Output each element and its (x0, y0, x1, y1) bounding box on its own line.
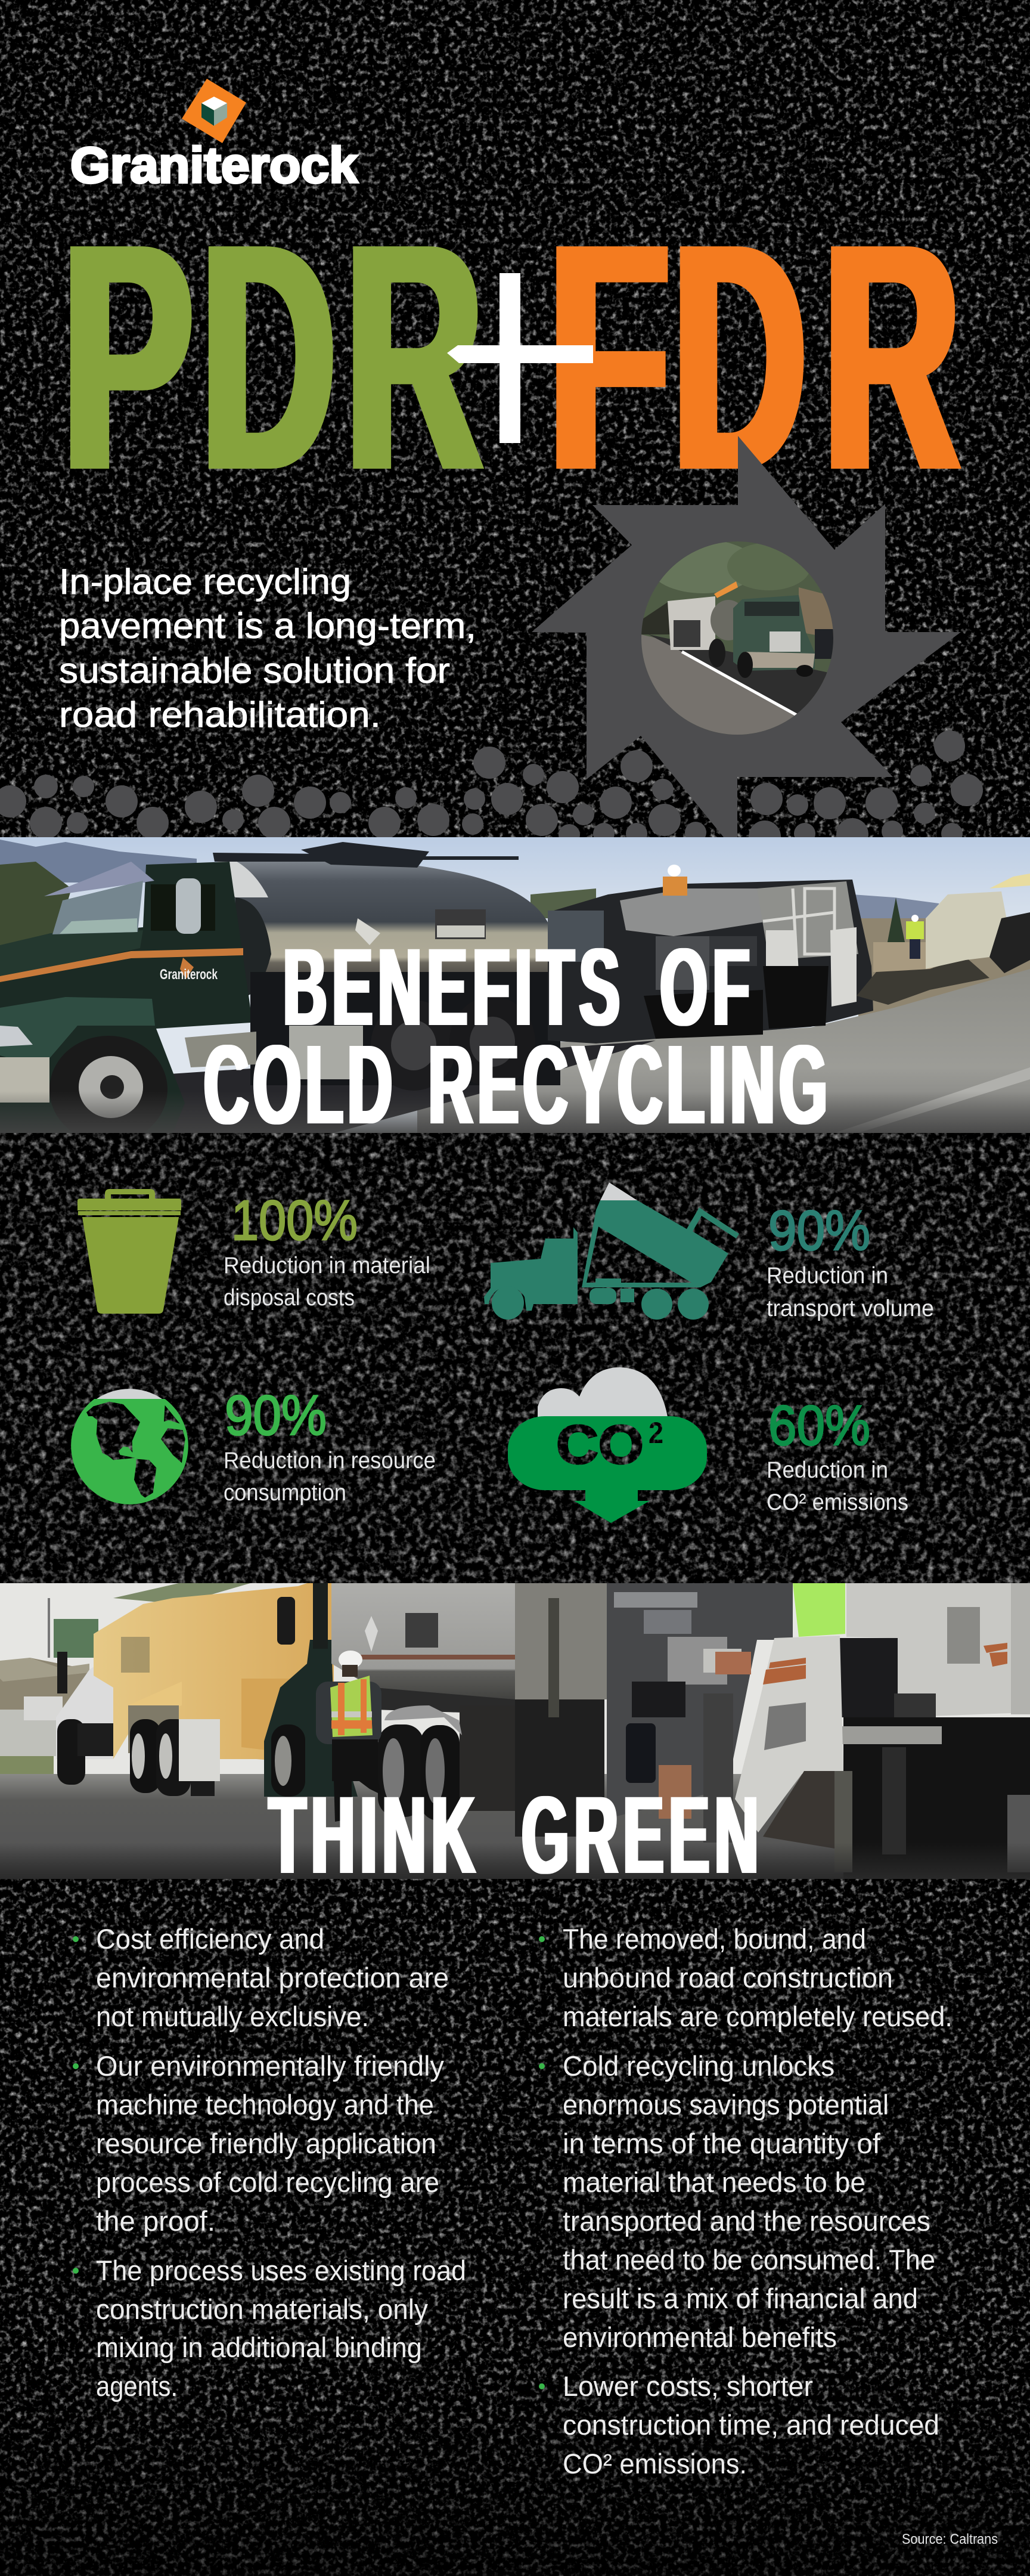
stat: 90% reduction in transport volume: 90% (768, 1199, 870, 1262)
background: asphalt texture middle (0, 1133, 1030, 1583)
icon: CO2 cloud with down arrow (508, 1367, 707, 1523)
bullet: materials reused: unbound road construction (563, 1962, 893, 1993)
bullet: cost efficiency (73, 1923, 449, 2032)
icon: orange diamond with cube (182, 79, 246, 143)
rear tyres and mudflap (130, 1719, 161, 1793)
bullet: savings potential: enormous savings potential (563, 2089, 889, 2120)
stat: 60% reduction in CO2 emissions (508, 1367, 908, 1523)
heading: Benefits of Cold Recycling: BENEFITS OF (283, 925, 755, 1049)
road surface (417, 969, 1030, 1133)
bullet: cost efficiency: environmental protection are (96, 1962, 449, 1993)
bullet: lower costs: construction time, and reduced (563, 2409, 939, 2441)
title word: FDR: D (673, 176, 806, 537)
bullet: machine technology: process of cold recycling are (96, 2166, 439, 2198)
stat: 90% reduction in resource consumption: consumption (224, 1480, 346, 1506)
stat: 90% reduction in transport volume: Reduction in (767, 1263, 888, 1289)
stat: 90% reduction in resource consumption (71, 1384, 436, 1506)
icon: saw blade gear with photo (532, 436, 961, 841)
yellow tanker (94, 1583, 334, 1765)
bullet: savings potential: material that needs to be (563, 2166, 865, 2198)
bullet: savings potential: environmental benefits (563, 2321, 837, 2353)
milling machine (548, 880, 873, 1044)
source note: Source: Caltrans (902, 2531, 998, 2547)
front wheel (49, 1036, 167, 1143)
heading: Think Green: THINK GREEN (269, 1773, 764, 1897)
icon: globe (71, 1389, 188, 1504)
bullet: lower costs (539, 2370, 939, 2479)
bullet: machine technology: the proof. (96, 2205, 215, 2237)
bullets: left column (73, 1923, 466, 2402)
tyres (378, 1724, 424, 1817)
bullet: existing materials: mixing in additional binding (96, 2332, 422, 2363)
road (0, 1774, 1030, 1879)
stat: 100% reduction in material disposal costs: Reduction in material (224, 1253, 430, 1278)
machinery (515, 1583, 607, 1699)
intro text block: road rehabilitation. (59, 695, 381, 735)
bullet: savings potential: that need to be consumed. The (563, 2244, 935, 2275)
cab (0, 862, 250, 1133)
tanker (218, 854, 551, 990)
title word: FDR: F (548, 177, 670, 538)
bullet: lower costs: CO² emissions. (563, 2448, 747, 2479)
bullet: existing materials (73, 2255, 466, 2402)
background: asphalt texture bottom (0, 1879, 1030, 2576)
title word: PDR: D (201, 176, 336, 537)
house (0, 1658, 89, 1711)
bullet: machine technology (73, 2050, 444, 2237)
title word: PDR (63, 176, 483, 538)
worker (316, 1682, 381, 1744)
stat: 90% reduction in transport volume: transport volume (767, 1296, 934, 1321)
intro text block: In-place recycling (59, 562, 351, 602)
intro text block: pavement is a long-term, (59, 606, 476, 646)
title word: FDR (548, 176, 960, 538)
stat: 90% reduction in transport volume (484, 1182, 934, 1321)
icon: trash can (77, 1189, 181, 1314)
bullet: materials reused: The removed, bound, and (563, 1923, 866, 1955)
heading: Benefits of Cold Recycling (204, 925, 832, 1148)
roof rack (213, 842, 519, 868)
title word: PDR: P (63, 177, 193, 537)
bullet: materials reused: materials are completely reused. (563, 2001, 953, 2032)
intro text block: sustainable solution for (59, 651, 450, 691)
decorative: grey aggregate circles (0, 730, 983, 853)
bullet: savings potential: transported and the resources (563, 2205, 930, 2237)
distant ground and trees (858, 918, 1030, 1026)
bullet: existing materials: agents. (96, 2370, 178, 2402)
bullet: savings potential (539, 2050, 935, 2353)
icon: dump truck (484, 1182, 739, 1320)
stat: 100% reduction in material disposal costs: disposal costs (224, 1285, 355, 1311)
bullet: materials reused (539, 1923, 953, 2032)
stat: 60% reduction in CO2 emissions: 60% (768, 1394, 870, 1457)
title word: PDR: R (346, 177, 483, 538)
bullet: savings potential: in terms of the quantity of (563, 2128, 881, 2159)
stat: 60% reduction in CO2 emissions: CO² emissions (767, 1490, 908, 1515)
bullet: cost efficiency: Cost efficiency and (96, 1923, 324, 1955)
bullet: existing materials: The process uses existing road (96, 2255, 466, 2286)
dark green cab (264, 1640, 358, 1797)
title: PDR + FDR (63, 176, 960, 538)
icon: white plus sign (447, 273, 593, 443)
photo band: tanker truck and milling machine: Graniterock (160, 967, 218, 983)
bullet: machine technology: machine technology and the (96, 2089, 434, 2120)
photo band: tanker truck and milling machine (0, 837, 1030, 1143)
silver tanker (331, 1583, 610, 1705)
bullet: existing materials: construction materials, only (96, 2293, 428, 2325)
stat: 100% reduction in material disposal costs (77, 1189, 430, 1314)
bullet: machine technology: resource friendly application (96, 2128, 436, 2159)
background: asphalt texture top (0, 0, 1030, 837)
stat: 60% reduction in CO2 emissions: Reduction in (767, 1457, 888, 1483)
bullets: right column (539, 1923, 953, 2479)
logo: Graniterock (70, 79, 358, 193)
dirt windrow (857, 957, 989, 1005)
white truck cab (56, 1664, 113, 1759)
bullet: savings potential: Cold recycling unlocks (563, 2050, 834, 2082)
heading: Benefits of Cold Recycling: COLD RECYCLING (204, 1022, 832, 1148)
bullet: cost efficiency: not mutually exclusive. (96, 2001, 369, 2032)
photo band: water truck, worker and recycler (0, 1583, 1030, 1879)
stat: 90% reduction in resource consumption: Reduction in resource (224, 1448, 436, 1473)
logo: Graniterock: Graniterock (70, 137, 358, 193)
bullet: savings potential: result is a mix of financial and (563, 2283, 918, 2314)
bullet: machine technology: Our environmentally friendly (96, 2050, 444, 2082)
stat: 90% reduction in resource consumption: 90% (225, 1384, 327, 1447)
bullet: lower costs: Lower costs, shorter (563, 2370, 813, 2402)
title word: FDR: R (824, 177, 960, 538)
photo: road crew in circular window (638, 537, 837, 739)
paver and worker (926, 891, 1013, 969)
stat: 100% reduction in material disposal costs: 100% (231, 1189, 358, 1252)
chassis (250, 972, 560, 1085)
intro text block (59, 562, 476, 735)
